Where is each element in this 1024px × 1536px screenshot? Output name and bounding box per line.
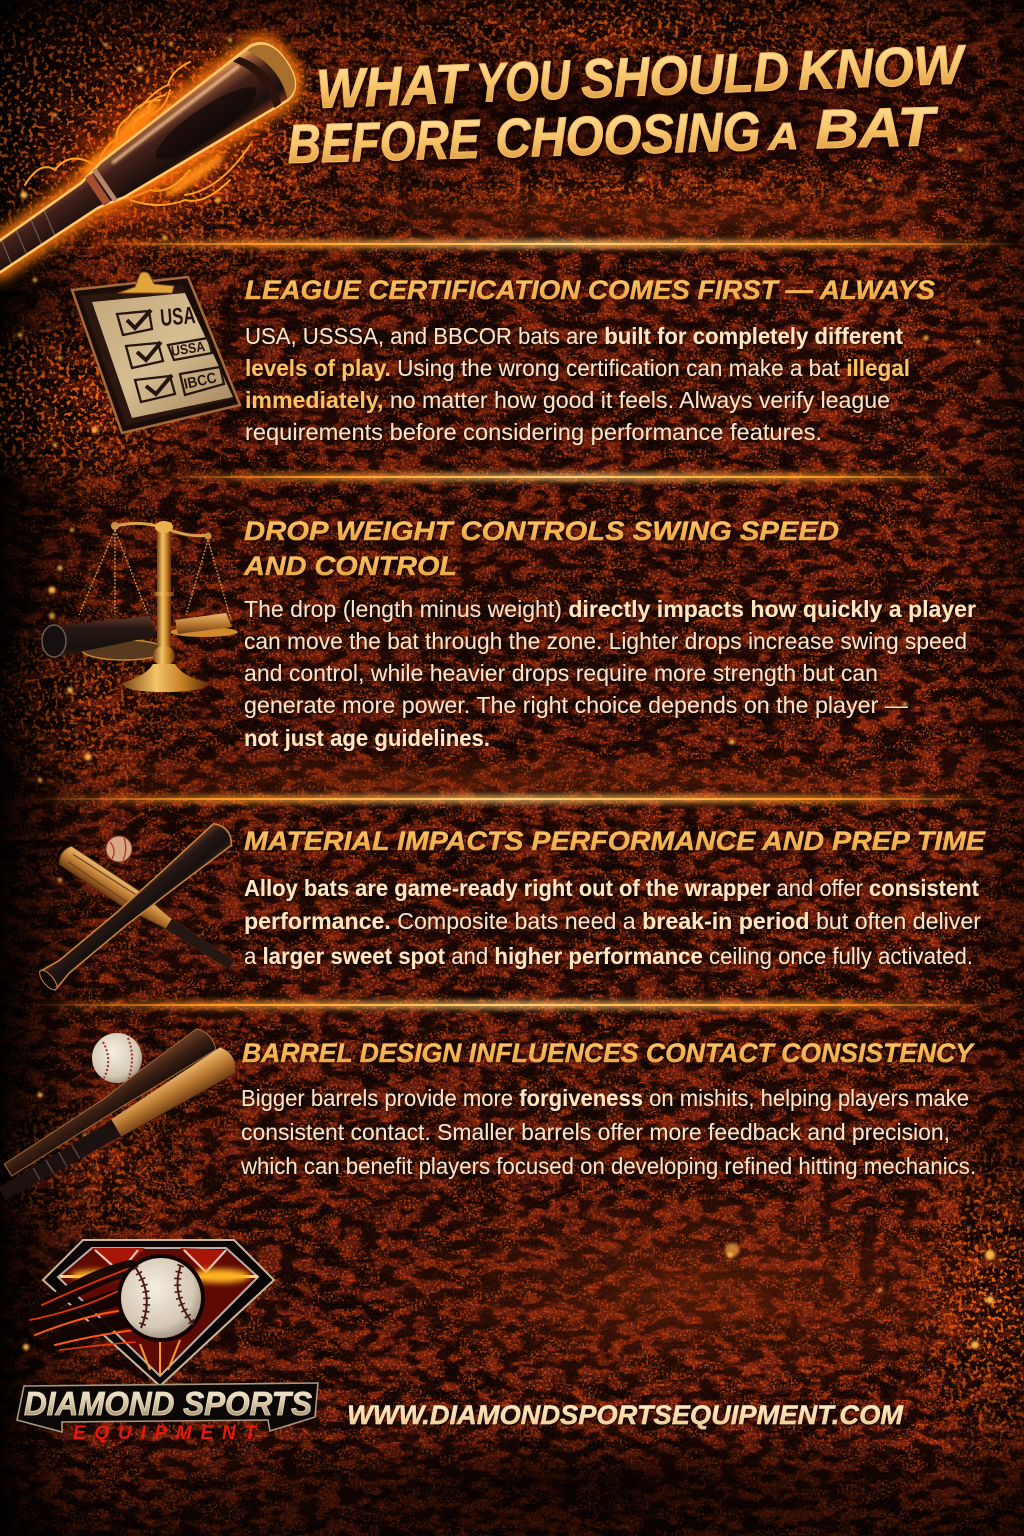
title: WHAT bbox=[315, 52, 471, 120]
icon: certification clipboard bbox=[72, 272, 240, 433]
section 2 body text bbox=[244, 596, 976, 751]
title: SHOULD bbox=[580, 40, 790, 110]
section 2 body text: and control, while heavier drops require more strength but can bbox=[244, 660, 878, 686]
section 1 body text: requirements before considering performance features. bbox=[245, 419, 822, 445]
title: A bbox=[767, 116, 799, 159]
icon: flaming bat bbox=[0, 0, 337, 306]
section 3 heading: MATERIAL IMPACTS PERFORMANCE AND PREP TIME bbox=[244, 826, 986, 856]
section 1 body text: levels of play. Using the wrong certification can make a bat illegal bbox=[245, 355, 910, 381]
section 2 body text: can move the bat through the zone. Lighter drops increase swing speed bbox=[244, 628, 967, 654]
section 4: barrel design bbox=[240, 1038, 976, 1179]
divider 3 bbox=[30, 795, 1000, 803]
title: BAT bbox=[814, 95, 940, 160]
icon: certification clipboard: USA bbox=[159, 302, 196, 332]
section 2 heading: AND CONTROL bbox=[243, 551, 457, 581]
icon: certification clipboard: USSA bbox=[170, 338, 206, 359]
divider 1 bbox=[90, 240, 1024, 248]
section 2: drop weight bbox=[243, 516, 976, 751]
section 3 body text: Alloy bats are game-ready right out of the wrapper and offer consistent bbox=[244, 875, 979, 901]
title: BEFORE bbox=[287, 108, 482, 175]
section 2 body text: not just age guidelines. bbox=[244, 725, 490, 751]
section 4 body text: Bigger barrels provide more forgiveness on mishits, helping players make bbox=[241, 1085, 969, 1111]
icon: crossed bats and ball bbox=[35, 820, 237, 994]
section 4 heading: BARREL DESIGN INFLUENCES CONTACT CONSISTENCY bbox=[242, 1038, 976, 1068]
icon: certification clipboard: IBCC bbox=[182, 369, 218, 393]
section 2 heading: DROP WEIGHT CONTROLS SWING SPEED bbox=[244, 516, 839, 546]
logo: Diamond Sports Equipment bbox=[17, 1240, 318, 1444]
logo diamond bbox=[30, 1240, 274, 1386]
icon: two bats and ball bbox=[0, 1025, 240, 1204]
section 3 body text: a larger sweet spot and higher performance ceiling once fully activated. bbox=[244, 943, 973, 969]
section 2 body text: generate more power. The right choice depends on the player — bbox=[244, 692, 908, 718]
section 3: material bbox=[244, 826, 986, 969]
logo banner bbox=[17, 1383, 318, 1444]
section 3 body text: performance. Composite bats need a break-in period but often deliver bbox=[244, 908, 981, 934]
section 4 body text: which can benefit players focused on developing refined hitting mechanics. bbox=[240, 1153, 976, 1179]
title: KNOW bbox=[797, 33, 968, 101]
website URL: WWW.DIAMONDSPORTSEQUIPMENT.COM bbox=[347, 1400, 904, 1430]
section 1 body text: immediately, no matter how good it feels. Always verify league bbox=[245, 387, 890, 413]
title: YOU bbox=[475, 48, 572, 114]
title bbox=[287, 33, 968, 175]
divider 2 bbox=[160, 473, 970, 481]
section 1 heading: LEAGUE CERTIFICATION COMES FIRST — ALWAYS bbox=[245, 275, 935, 305]
section 1 body text: USA, USSSA, and BBCOR bats are built for completely different bbox=[245, 323, 903, 349]
section 4 body text: consistent contact. Smaller barrels offer more feedback and precision, bbox=[241, 1119, 950, 1145]
logo banner: EQUIPMENT bbox=[73, 1423, 257, 1444]
section 3 body text bbox=[244, 875, 981, 969]
divider 4 bbox=[30, 1001, 1000, 1009]
section 1 body text bbox=[245, 323, 910, 445]
icon: balance scale with bats bbox=[42, 521, 238, 692]
section 2 body text: The drop (length minus weight) directly impacts how quickly a player bbox=[244, 596, 976, 622]
title: CHOOSING bbox=[495, 100, 761, 169]
section 2 heading bbox=[243, 516, 839, 581]
section 1: league certification bbox=[245, 275, 935, 445]
logo banner: DIAMOND SPORTS bbox=[24, 1385, 312, 1422]
section 4 body text bbox=[240, 1085, 976, 1179]
logo baseball bbox=[117, 1254, 205, 1342]
